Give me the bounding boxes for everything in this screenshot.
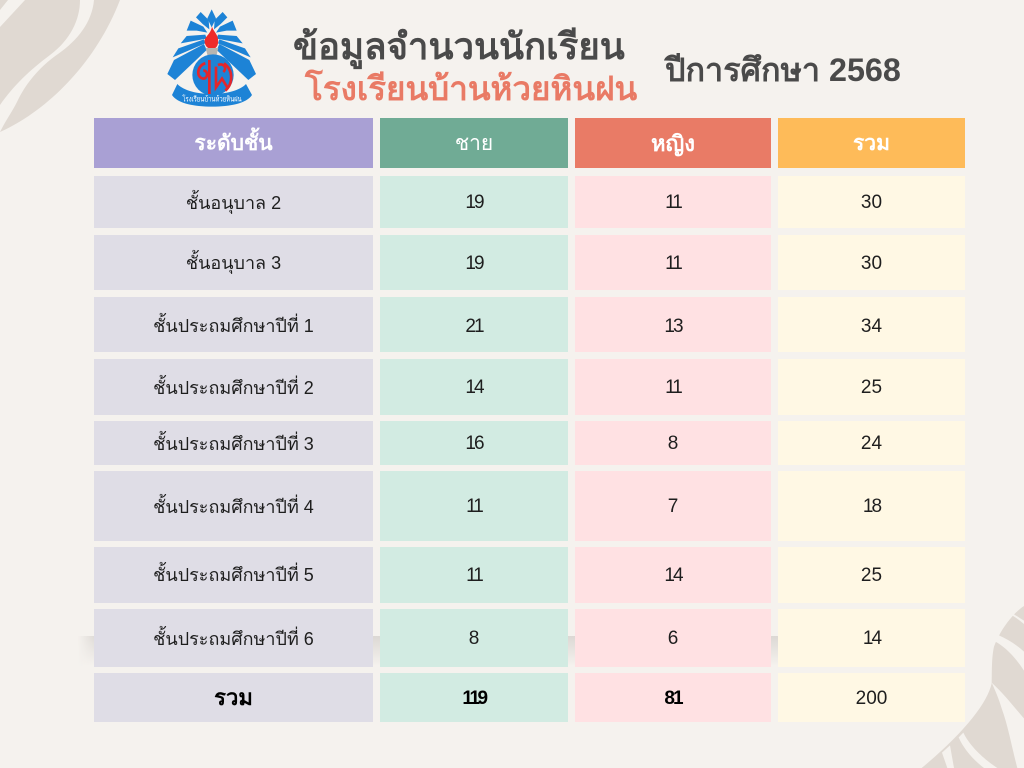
row: primary 6: ชั้นประถมศึกษาปีที่ 6	[153, 628, 314, 648]
row: primary 6	[94, 609, 965, 667]
row: primary 4	[94, 471, 965, 541]
row: primary 1: ชั้นประถมศึกษาปีที่ 1	[153, 316, 314, 336]
table header row: หญิง	[651, 130, 695, 156]
row: kindergarten 3	[94, 235, 965, 290]
row: primary 4: 11	[466, 496, 482, 517]
icon: emblem circle	[192, 54, 234, 96]
row: primary 1: 34	[861, 316, 882, 336]
row: primary 2: 25	[861, 377, 882, 398]
decoration: top-left leaf	[0, 0, 120, 132]
row: totals: 200	[856, 688, 887, 708]
table header row: ชาย	[455, 132, 493, 155]
decoration: bottom-right leaf	[922, 606, 1024, 768]
row: primary 1: 21	[465, 316, 483, 336]
row: totals: 81	[664, 688, 682, 708]
row: kindergarten 2: 11	[665, 192, 681, 213]
row: primary 3: 16	[465, 433, 483, 454]
row: primary 3	[94, 421, 965, 465]
title: ข้อมูลจำนวนนักเรียน	[293, 26, 625, 67]
school logo	[167, 10, 256, 107]
row: primary 6: 8	[469, 628, 479, 649]
logo ribbon: โรงเรียนบ้านห้วยหินฝน	[182, 94, 242, 103]
table header row	[94, 118, 965, 168]
row: totals	[94, 673, 965, 722]
row: primary 1: 13	[664, 316, 682, 336]
row: kindergarten 2	[94, 176, 965, 228]
table header row: รวม	[853, 132, 890, 155]
row: primary 4: 18	[863, 496, 880, 517]
data table	[94, 118, 965, 722]
row: primary 3: ชั้นประถมศึกษาปีที่ 3	[153, 434, 314, 454]
subtitle: school name: โรงเรียนบ้านห้วยหินฝน	[305, 71, 637, 108]
row: totals: 119	[462, 688, 486, 708]
row: primary 2: 14	[465, 377, 483, 398]
row: primary 2: ชั้นประถมศึกษาปีที่ 2	[153, 378, 314, 398]
row: kindergarten 3: 30	[861, 252, 882, 274]
row: primary 5	[94, 547, 965, 603]
row: primary 4: 7	[668, 496, 678, 517]
row: primary 5: 25	[861, 564, 882, 586]
icon: torch	[205, 27, 218, 59]
row: primary 6: 6	[668, 628, 678, 649]
row: totals: รวม	[214, 685, 253, 710]
row: primary 1	[94, 297, 965, 352]
row: kindergarten 2: 19	[465, 192, 483, 213]
row: primary 2	[94, 359, 965, 415]
row: primary 5: 14	[664, 564, 682, 586]
row: kindergarten 2: ชั้นอนุบาล 2	[186, 192, 281, 212]
row: primary 4: ชั้นประถมศึกษาปีที่ 4	[153, 496, 314, 516]
row: kindergarten 3: 19	[465, 252, 483, 274]
row: primary 5: 11	[466, 564, 482, 586]
row: primary 5: ชั้นประถมศึกษาปีที่ 5	[153, 565, 314, 585]
row: kindergarten 3: 11	[665, 252, 681, 274]
table header row: ระดับชั้น	[194, 132, 273, 155]
row: kindergarten 2: 30	[861, 192, 882, 213]
academic year: ปีการศึกษา 2568	[665, 52, 901, 88]
row: primary 2: 11	[665, 377, 681, 398]
row: kindergarten 3: ชั้นอนุบาล 3	[186, 253, 281, 273]
row: primary 6: 14	[863, 628, 880, 649]
row: primary 3: 8	[668, 433, 678, 454]
row: primary 3: 24	[861, 433, 882, 454]
decoration: faint shadow band behind table	[84, 636, 778, 656]
